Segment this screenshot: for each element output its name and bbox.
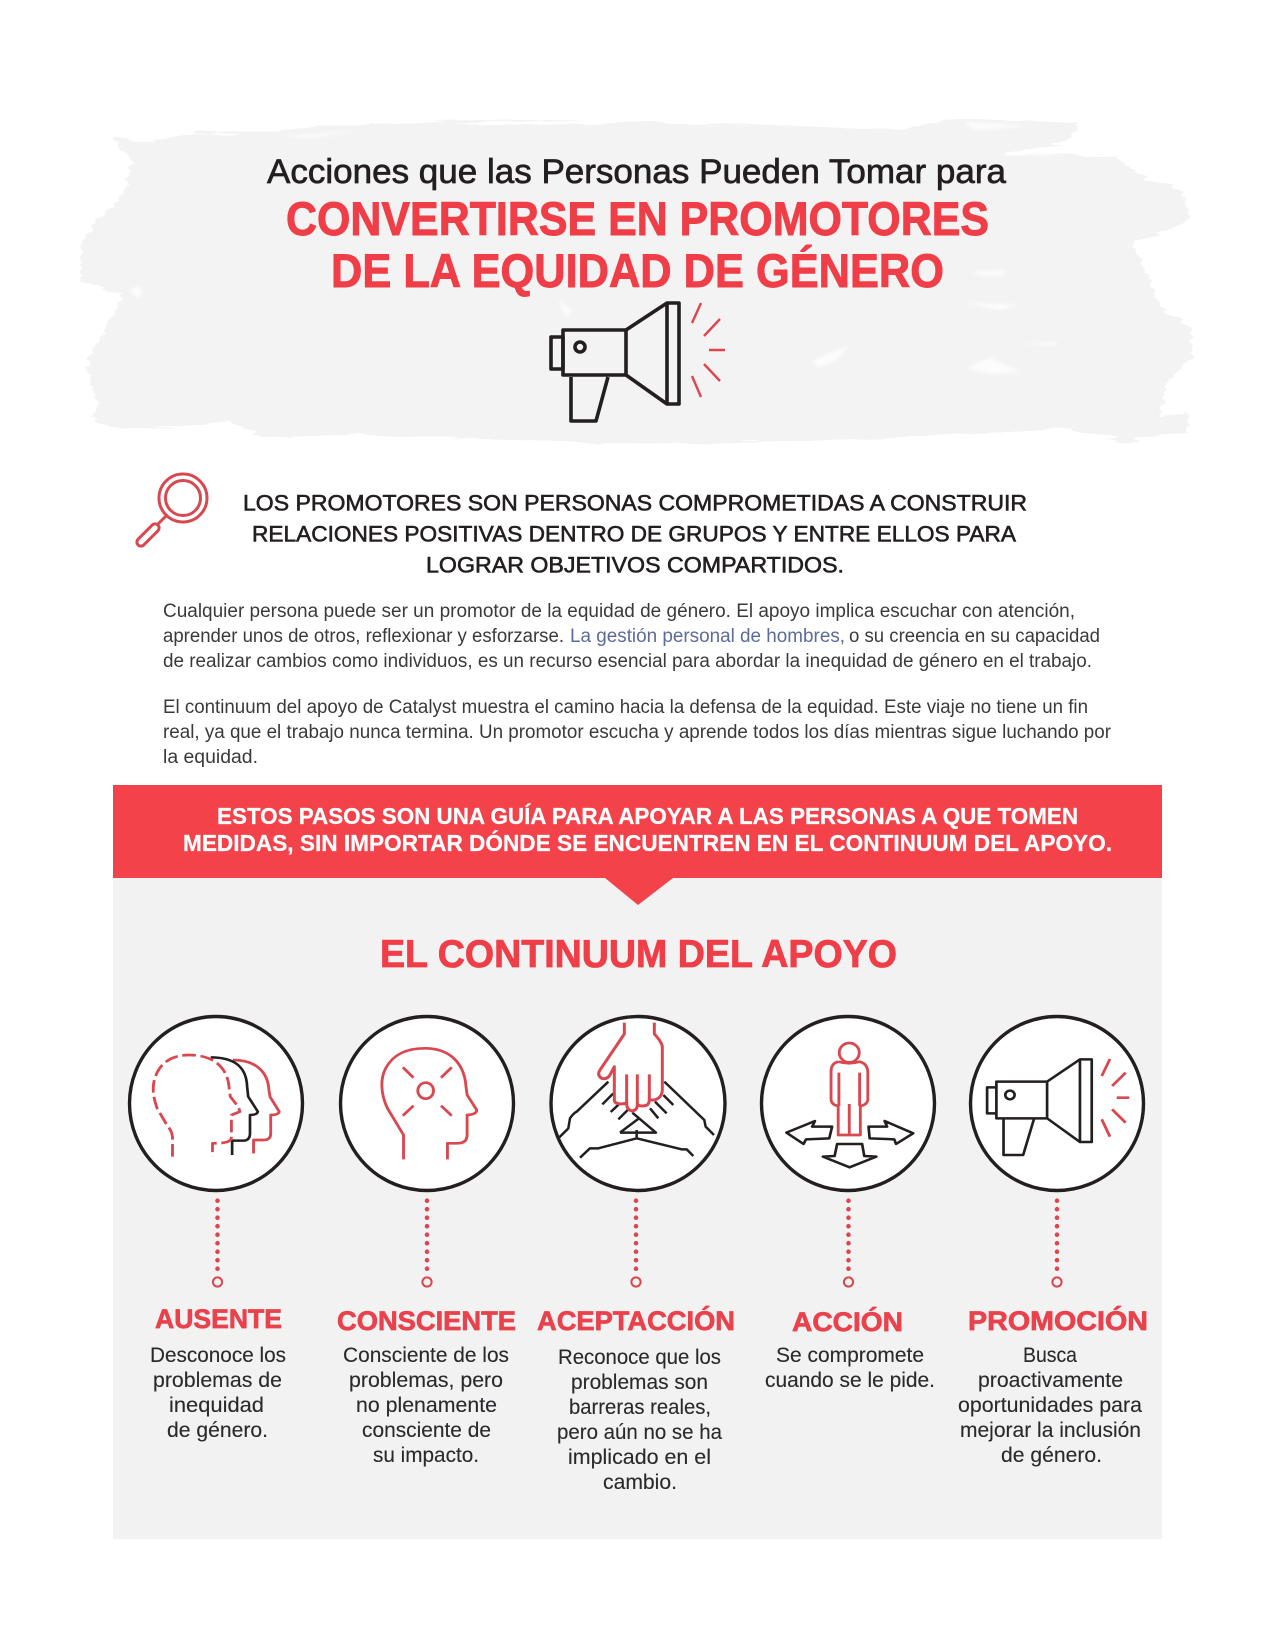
paragraph: continuum: la equidad. <box>163 747 258 768</box>
description: Consciente de los <box>343 1344 509 1367</box>
label: AUSENTE <box>155 1304 282 1334</box>
description: pero aún no se ha <box>557 1421 722 1444</box>
paragraph: apoyo: de realizar cambios como individuos, es un recurso esencial para abordar la inequidad de género en el trabajo. <box>163 651 1092 672</box>
description: Reconoce que los <box>558 1346 721 1369</box>
description <box>765 1344 935 1392</box>
paragraph: apoyo: La gestión personal de hombres, <box>570 626 845 647</box>
description: cambio. <box>603 1471 677 1494</box>
description <box>958 1344 1142 1467</box>
description: proactivamente <box>978 1369 1123 1392</box>
dotted connector <box>1052 1201 1062 1287</box>
dotted connector <box>844 1201 853 1287</box>
label: ACCIÓN <box>792 1306 903 1337</box>
description: de género. <box>167 1419 268 1442</box>
title: Acciones que las Personas Pueden Tomar para <box>267 153 1006 191</box>
red banner: MEDIDAS, SIN IMPORTAR DÓNDE SE ENCUENTREN EN EL CONTINUUM DEL APOYO. <box>183 829 1112 856</box>
label: ACEPTACCIÓN <box>537 1305 735 1336</box>
paragraph: apoyo <box>163 601 1100 672</box>
paragraph: continuum: El continuum del apoyo de Catalyst muestra el camino hacia la defensa de la equidad. Este viaje no tiene un fin <box>163 697 1088 718</box>
description: su impacto. <box>373 1444 479 1467</box>
description: no plenamente <box>356 1394 497 1417</box>
description: barreras reales, <box>569 1396 711 1419</box>
description: oportunidades para <box>958 1394 1142 1417</box>
description: cuando se le pide. <box>765 1369 935 1392</box>
description <box>557 1346 722 1494</box>
description: inequidad <box>169 1394 264 1417</box>
description: mejorar la inclusión <box>960 1419 1141 1442</box>
red banner <box>113 785 1162 905</box>
definition heading <box>243 490 1027 578</box>
continuum heading: EL CONTINUUM DEL APOYO <box>380 933 897 976</box>
description: problemas, pero <box>349 1369 503 1392</box>
step: aceptacción <box>537 1016 735 1494</box>
step: acción <box>762 1016 935 1392</box>
description: Se compromete <box>776 1344 924 1367</box>
label: CONSCIENTE <box>337 1306 516 1336</box>
paragraph: apoyo: aprender unos de otros, reflexionar y esforzarse. <box>163 626 564 647</box>
title: DE LA EQUIDAD DE GÉNERO <box>331 244 944 298</box>
description: Busca <box>1023 1344 1077 1367</box>
panel: continuum background <box>113 878 1162 1539</box>
icon: person with arrows <box>762 1016 934 1190</box>
description: de género. <box>1001 1444 1102 1467</box>
description: problemas de <box>153 1369 282 1392</box>
icon: megaphone large <box>551 303 725 421</box>
brush stroke background <box>80 118 1193 443</box>
dotted connector <box>631 1201 641 1287</box>
icon: hands <box>551 1016 725 1190</box>
red banner: ESTOS PASOS SON UNA GUÍA PARA APOYAR A LAS PERSONAS A QUE TOMEN <box>217 802 1078 829</box>
paragraph: continuum: real, ya que el trabajo nunca termina. Un promotor escucha y aprende todos los días mientras sigue luchando por <box>163 722 1112 743</box>
icon: three heads <box>130 1016 302 1190</box>
description <box>150 1344 286 1442</box>
description: problemas son <box>571 1371 708 1394</box>
paragraph: apoyo: Cualquier persona puede ser un promotor de la equidad de género. El apoyo implica escuchar con atención, <box>163 601 1075 622</box>
definition heading: LOGRAR OBJETIVOS COMPARTIDOS. <box>426 552 844 578</box>
label: PROMOCIÓN <box>968 1305 1148 1336</box>
description: consciente de <box>362 1419 491 1442</box>
description <box>343 1344 509 1467</box>
paragraph: continuum <box>163 697 1112 768</box>
icon: head with light <box>340 1016 514 1190</box>
title: CONVERTIRSE EN PROMOTORES <box>286 193 989 246</box>
step: consciente <box>337 1016 516 1467</box>
icon: megaphone <box>970 1016 1144 1190</box>
dotted connector <box>213 1201 222 1287</box>
definition heading: LOS PROMOTORES SON PERSONAS COMPROMETIDAS A CONSTRUIR <box>243 490 1027 516</box>
step: ausente <box>130 1016 302 1442</box>
icon: magnifying glass <box>135 474 207 548</box>
description: implicado en el <box>568 1446 711 1469</box>
title <box>267 153 1006 298</box>
step: promoción <box>958 1016 1148 1467</box>
dotted connector <box>422 1201 432 1287</box>
description: Desconoce los <box>150 1344 286 1367</box>
definition heading: RELACIONES POSITIVAS DENTRO DE GRUPOS Y ENTRE ELLOS PARA <box>252 522 1016 546</box>
paragraph: apoyo: o su creencia en su capacidad <box>849 626 1100 647</box>
